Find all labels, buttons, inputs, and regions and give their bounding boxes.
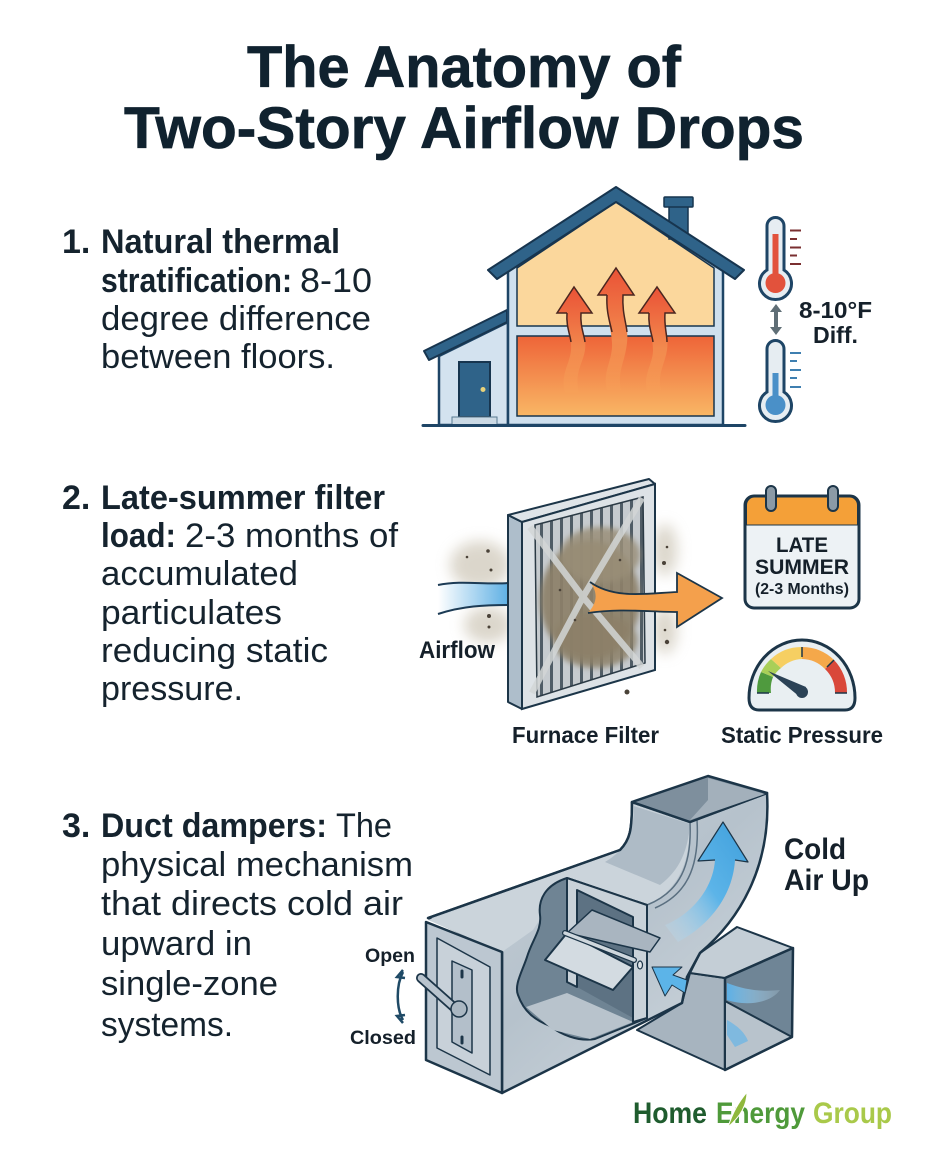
small cold air arrow (652, 967, 687, 996)
icon: temperature difference arrow (770, 304, 782, 335)
downstairs room (517, 336, 714, 416)
damper axle (565, 933, 634, 960)
text block: point 1 (62, 223, 372, 376)
handle plate holes (460, 971, 464, 1043)
branch duct top (690, 927, 793, 978)
axle bolt (638, 961, 642, 969)
text block: point 1: between floors. (101, 338, 335, 376)
title: The Anatomy of (247, 35, 682, 100)
handle lever (421, 978, 457, 1010)
filtered air arrow outline (588, 573, 722, 627)
label: temperature difference (799, 297, 872, 348)
logo: Home Energy Group: Energy (716, 1097, 805, 1130)
filtered air arrow (588, 573, 722, 627)
annex roof (424, 310, 507, 360)
cutaway interior (517, 878, 647, 1040)
handle plate (452, 961, 472, 1053)
duct top face (428, 804, 690, 952)
duct body silhouette (428, 793, 767, 1093)
title: Two-Story Airflow Drops (124, 96, 804, 161)
branch lower swoosh (727, 1020, 748, 1047)
heat arrow middle outline (598, 268, 634, 332)
icon: late summer calendar: LATE (776, 534, 828, 557)
text block: point 2 (62, 479, 399, 708)
text block: point 1: 8-10 (300, 262, 372, 300)
damper blade front (545, 933, 633, 990)
branch opening edge (725, 948, 793, 1070)
text block: point 3: 3. (62, 807, 90, 845)
branch duct side (637, 973, 725, 1070)
text block: point 1: Natural thermal (101, 223, 340, 261)
icon: late summer calendar: (2-3 Months) (755, 581, 849, 598)
icon: hot thermometer (760, 218, 801, 300)
text block: point 3: The (336, 807, 392, 845)
handle hub (451, 1001, 467, 1017)
label: open: Open (365, 946, 415, 967)
heat arrow middle (598, 268, 634, 390)
text block: point 1: stratification: (101, 262, 292, 300)
elbow top edge (428, 802, 632, 918)
large arrow head outline (698, 822, 748, 862)
text block: point 3: Duct dampers: (101, 807, 327, 845)
incoming airflow band (438, 583, 508, 614)
airflow outline (438, 583, 508, 614)
cutaway floor (526, 993, 633, 1039)
ground line (423, 424, 745, 427)
text block: point 2: 2. (62, 479, 90, 517)
illustration: duct damper (421, 776, 793, 1093)
text block: point 2: pressure. (101, 670, 243, 708)
text block: point 3: systems. (101, 1006, 233, 1044)
text block: point 3: upward in (101, 925, 252, 963)
logo: Home Energy Group: Group (813, 1097, 892, 1130)
text block: point 2: Late-summer filter (101, 479, 385, 517)
upstairs room (517, 202, 714, 326)
text block: point 3 (62, 807, 413, 1044)
dust cloud (450, 524, 677, 654)
label: static pressure: Static Pressure (721, 722, 883, 748)
heat arrow left outline (557, 287, 592, 342)
mounting plate (437, 938, 490, 1075)
branch air swoosh (727, 983, 780, 1003)
elbow seam (647, 820, 697, 908)
large cold air arrow (665, 822, 748, 942)
damper blade back (567, 910, 660, 952)
icon: static pressure gauge (749, 640, 855, 710)
icon: open closed arrow (397, 970, 405, 1023)
dust on pleats (540, 527, 640, 668)
annex wall (439, 322, 508, 425)
elbow opening inner wall (690, 778, 765, 820)
dust specks (466, 546, 669, 694)
text block: point 3: single-zone (101, 965, 278, 1003)
label: airflow: Airflow (419, 637, 495, 664)
heat arrow right (639, 287, 675, 390)
text block: point 1: 1. (62, 223, 90, 261)
text block: point 2: particulates (101, 594, 282, 632)
text block: point 1: degree difference (101, 300, 371, 338)
label: temperature difference: Diff. (813, 322, 858, 348)
text block: point 3: physical mechanism (101, 846, 413, 884)
damper opening (576, 890, 633, 1018)
door step (452, 417, 497, 425)
chimney (664, 197, 693, 239)
filter frame (522, 484, 655, 709)
handle lever highlight (421, 978, 457, 1010)
text block: point 2: accumulated (101, 555, 298, 593)
elbow bend shading (605, 806, 690, 885)
logo: Home Energy Group: Home (633, 1097, 707, 1130)
icon: cold thermometer (760, 340, 801, 422)
damper frame (567, 878, 647, 1022)
text block: point 2: 2-3 months of (185, 517, 399, 555)
heat arrow right outline (639, 287, 675, 342)
label: cold air up (784, 833, 869, 897)
illustration: clogged furnace filter (438, 479, 722, 709)
door (459, 362, 490, 417)
icon: late summer calendar: SUMMER (755, 556, 849, 579)
branch opening floor (726, 1001, 791, 1068)
main roof (488, 187, 744, 279)
illustration: two-story house with rising heat (423, 187, 745, 426)
filter pleats (535, 497, 645, 697)
damper axle highlight (565, 933, 634, 960)
elbow opening (632, 776, 767, 822)
branch opening (725, 948, 793, 1070)
filter side and top (508, 479, 655, 709)
door knob (480, 387, 486, 392)
logo: Home Energy Group (633, 1092, 892, 1130)
heat arrow left (557, 287, 592, 393)
text block: point 3: that directs cold air (101, 885, 403, 923)
filter braces (530, 498, 642, 693)
house wall (508, 196, 723, 425)
icon: late summer calendar (745, 486, 859, 608)
label: cold air up: Cold (784, 833, 846, 866)
text block: point 2: reducing static (101, 632, 328, 670)
text block: point 2: load: (101, 517, 176, 555)
label: furnace filter: Furnace Filter (512, 722, 659, 748)
label: cold air up: Air Up (784, 864, 869, 897)
label: temperature difference: 8-10°F (799, 297, 872, 323)
label: closed: Closed (350, 1028, 416, 1049)
title (124, 35, 804, 161)
end cap (426, 922, 502, 1093)
